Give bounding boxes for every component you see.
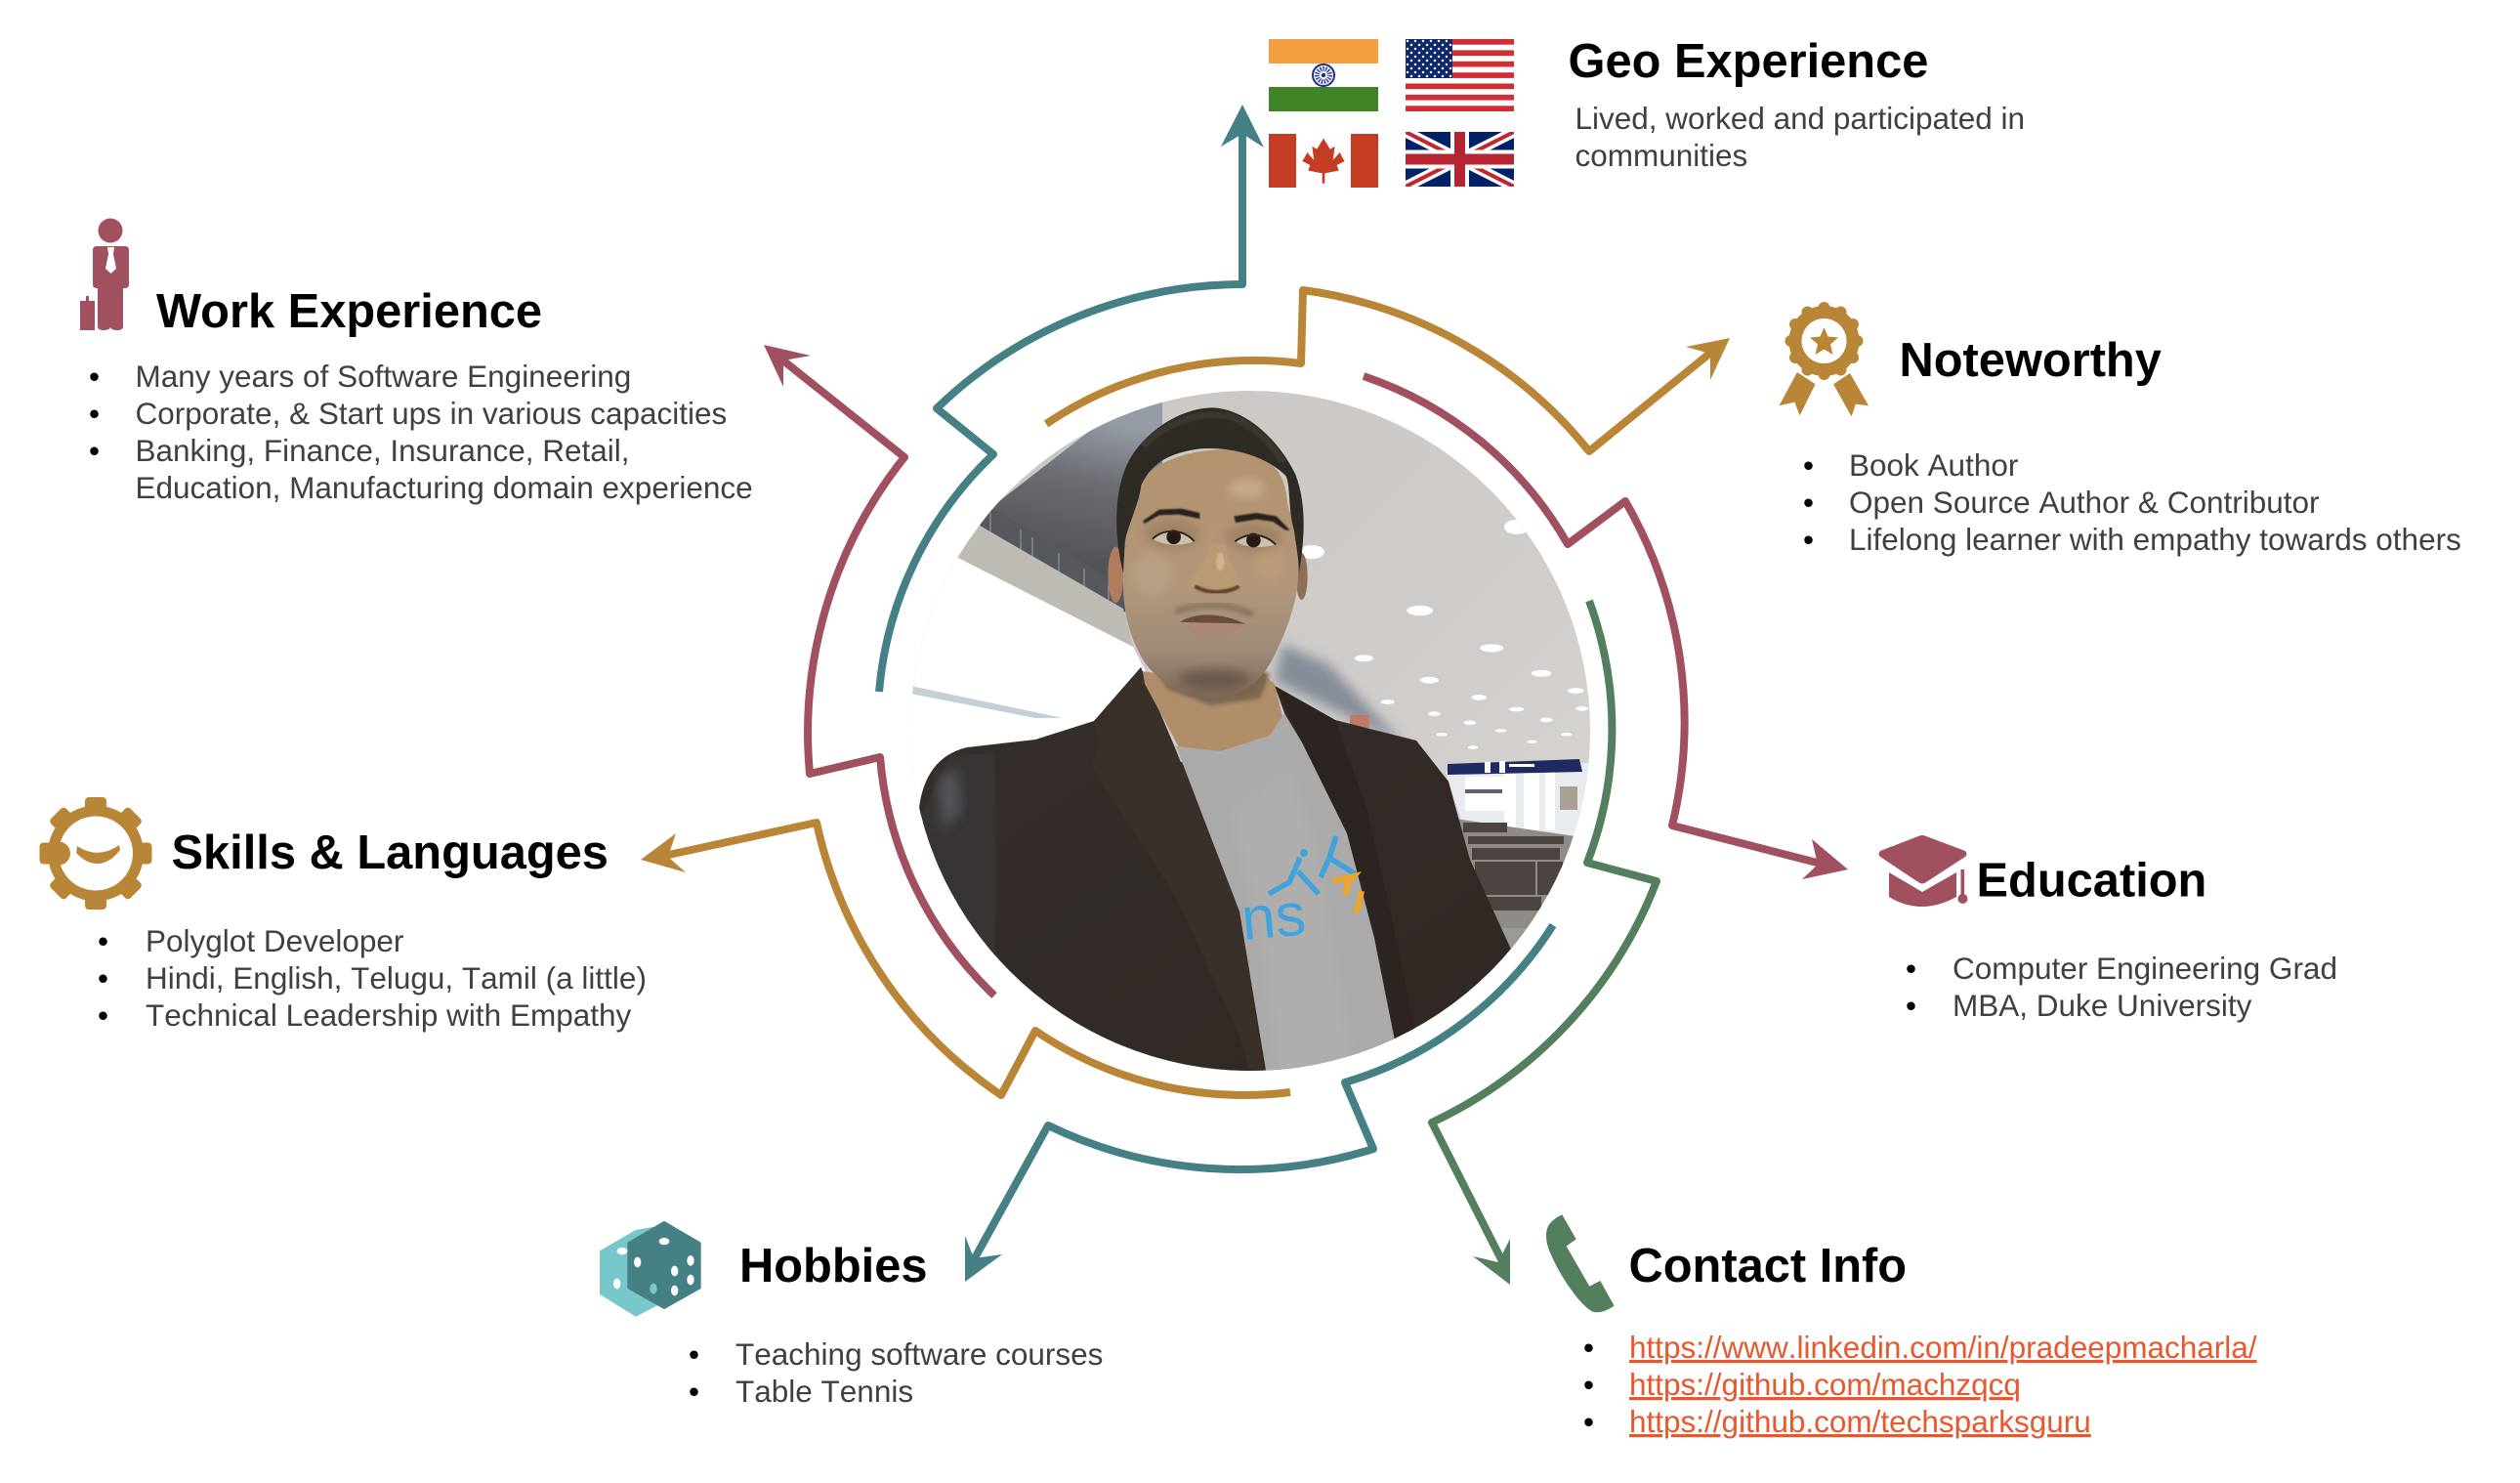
lapel right (1275, 686, 1416, 1055)
icon: award ribbon (1779, 302, 1869, 416)
heading: hobbies: Hobbies (739, 1240, 928, 1292)
t-shirt (1176, 713, 1395, 1071)
ring arrow: work experience (red) (764, 345, 994, 996)
list: work experience: • (89, 433, 100, 468)
heading: geo experience: Geo Experience (1569, 35, 1928, 88)
nose (1196, 544, 1227, 589)
face (1123, 449, 1298, 699)
list: noteworthy: Book Author (1849, 447, 2018, 483)
list: hobbies (689, 1336, 1103, 1409)
icon: dice (601, 1222, 700, 1316)
list: noteworthy: Lifelong learner with empathy towards others (1849, 522, 2461, 557)
list: work experience: • (89, 396, 100, 431)
concourse far end (1446, 763, 1588, 836)
ring arrow: contact info (green) (1432, 601, 1657, 1285)
window frame streak (910, 686, 1063, 718)
lapel left (1135, 667, 1264, 1071)
text: geo experience description: communities (1575, 138, 1747, 173)
list: skills and languages: • (98, 923, 108, 958)
seating rows (1459, 819, 1574, 977)
list: education: Computer Engineering Grad (1953, 951, 2337, 986)
list: education: • (1906, 988, 1916, 1023)
icon: gear with smile (39, 797, 152, 910)
mouth (1186, 625, 1244, 633)
light soffit (956, 526, 1133, 647)
list: work experience: • (89, 359, 100, 394)
ring arrow: education (red) (1364, 376, 1848, 879)
flag: Canada (1269, 134, 1378, 188)
list: hobbies: Teaching software courses (735, 1336, 1103, 1372)
flag: UK (1406, 132, 1514, 187)
list: skills and languages: Polyglot Developer (146, 923, 403, 958)
list: education: MBA, Duke University (1953, 988, 2252, 1023)
heading: contact info: Contact Info (1629, 1240, 1907, 1292)
beard shadow (1179, 668, 1250, 690)
list: noteworthy (1803, 447, 2461, 557)
airport sign (1448, 759, 1582, 775)
forehead shine (1229, 479, 1265, 498)
list: contact links: https://www.linkedin.com/in/pradeepmacharla/ (1629, 1330, 2257, 1365)
ring arrow: skills and languages (mustard) (641, 823, 1290, 1095)
list: skills and languages (98, 923, 647, 1033)
eyes (1154, 532, 1194, 545)
icon: graduation cap (1879, 835, 1967, 907)
shirt logo: ns (1239, 881, 1308, 953)
list: contact links: • (1583, 1367, 1594, 1402)
list: hobbies: • (689, 1374, 699, 1409)
flag: USA (1406, 39, 1514, 111)
list: noteworthy: Open Source Author & Contributor (1849, 485, 2320, 520)
shirt logo (1244, 835, 1365, 940)
heading: work experience: Work Experience (156, 285, 542, 338)
text: geo experience description: Lived, worked and participated in (1575, 101, 2025, 136)
list: contact links: https://github.com/machzqcq (1629, 1367, 2021, 1402)
list: skills and languages: Hindi, English, Telugu, Tamil (a little) (146, 960, 647, 996)
list: skills and languages: • (98, 997, 108, 1033)
flag: India (1269, 39, 1378, 111)
hair (1116, 407, 1304, 573)
list: work experience (89, 359, 753, 505)
list: work experience: Banking, Finance, Insurance, Retail, (135, 433, 630, 468)
ring arrow: geo experience (teal) (879, 105, 1264, 692)
list: noteworthy: • (1803, 485, 1814, 520)
list: work experience: Corporate, & Start ups in various capacities (135, 396, 727, 431)
list: noteworthy: • (1803, 447, 1814, 483)
near light by ear (1299, 545, 1324, 559)
list: work experience: Many years of Software Engineering (135, 359, 631, 394)
list: skills and languages: • (98, 960, 108, 996)
air vent (980, 508, 1123, 611)
list: contact links: • (1583, 1404, 1594, 1439)
list: noteworthy: • (1803, 522, 1814, 557)
eye sockets (1145, 520, 1199, 549)
ears (1108, 547, 1123, 603)
ceiling lights (1355, 520, 1588, 749)
icon: businessman with suitcase (80, 219, 129, 330)
window glare (910, 557, 1146, 808)
photo: portrait in circle (910, 391, 1590, 1071)
heading: noteworthy: Noteworthy (1899, 334, 2162, 387)
grey wall (980, 399, 1162, 613)
list: contact links: • (1583, 1330, 1594, 1365)
list: work experience: Education, Manufacturing domain experience (135, 470, 753, 505)
ring arrow: hobbies (teal) (965, 925, 1553, 1282)
list: hobbies: • (689, 1336, 699, 1372)
list: education: • (1906, 951, 1916, 986)
list: hobbies: Table Tennis (735, 1374, 913, 1409)
exit sign (1350, 715, 1369, 728)
icon: telephone handset (1546, 1214, 1615, 1312)
shadow beam behind head (1275, 645, 1407, 747)
ring arrow: noteworthy (mustard) (1046, 290, 1730, 451)
jacket sleeve highlight (923, 752, 996, 977)
list: contact links (1583, 1330, 2257, 1439)
moustache shadow (1175, 606, 1253, 615)
list: skills and languages: Technical Leadership with Empathy (146, 997, 632, 1033)
jacket body (919, 667, 1524, 1094)
list: education (1906, 951, 2337, 1023)
hair highlight (1143, 415, 1282, 462)
list: contact links: https://github.com/techsparksguru (1629, 1404, 2091, 1439)
heading: education: Education (1977, 854, 2206, 907)
heading: skills and languages: Skills & Languages (172, 826, 609, 879)
eyebrows (1143, 509, 1199, 524)
text: geo experience description (1575, 101, 2025, 173)
neck (1143, 671, 1282, 751)
